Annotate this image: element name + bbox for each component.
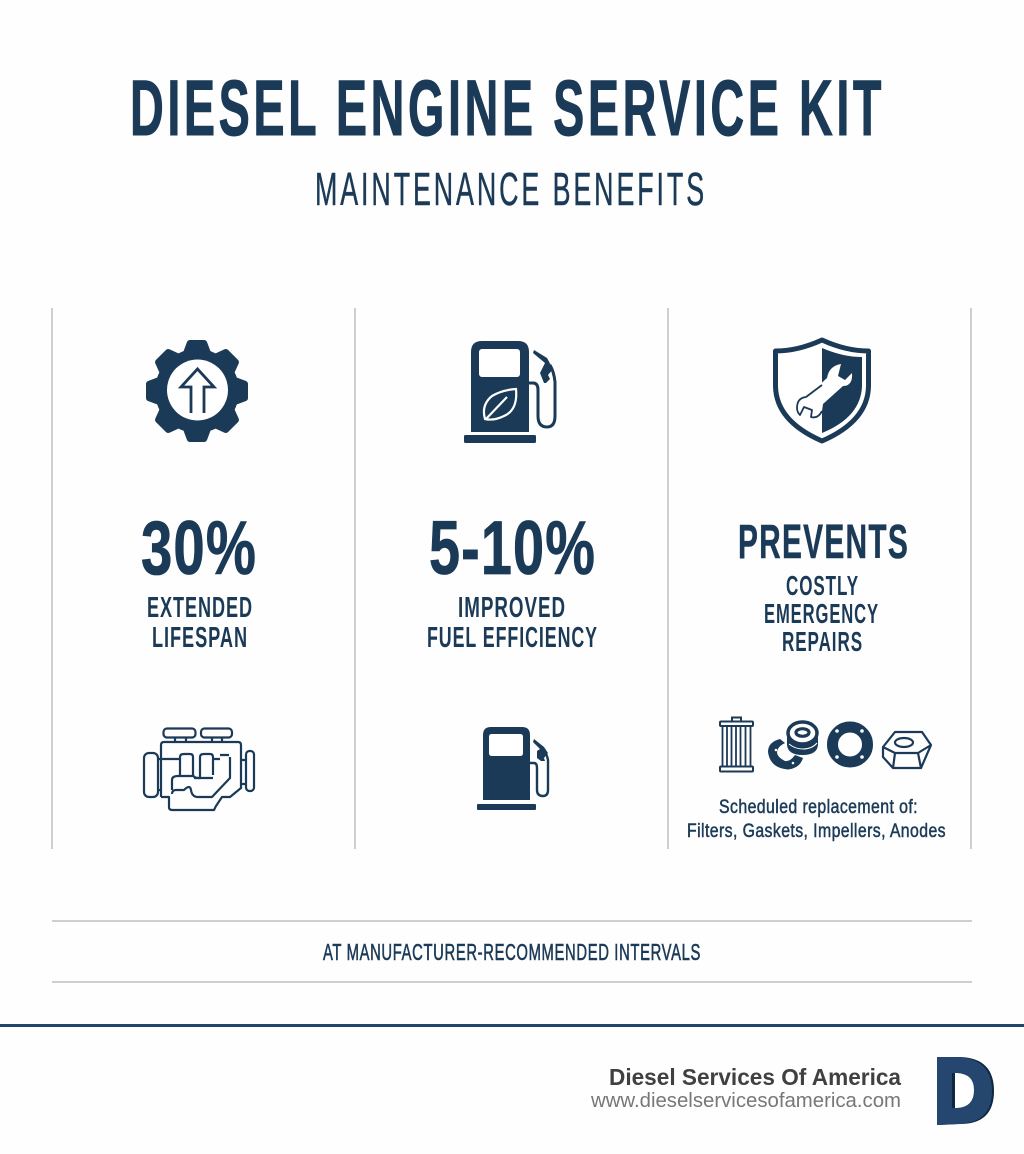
label: improved fuel efficiency: FUEL EFFICIENCY [427,622,598,654]
footer: company: www.dieselservicesofamerica.com [590,1090,901,1112]
icon: fuel pump with leaf [464,341,555,443]
caption: scheduled replacement [687,797,946,842]
icon: small fuel pump [477,727,548,810]
caption: scheduled replacement: Filters, Gaskets, Impellers, Anodes [687,821,946,842]
footer: company: Diesel Services Of America [609,1064,901,1090]
panel: prevents repairs [687,340,946,842]
subtitle: MAINTENANCE BENEFITS [315,163,707,215]
icon: gear with up arrow [146,340,248,442]
label: costly emergency repairs [764,570,879,657]
stat: 5-10%: 5-10% [429,506,596,591]
icon: engine [144,728,254,810]
label: improved fuel efficiency: IMPROVED [458,592,566,624]
label: extended lifespan: EXTENDED [147,592,253,624]
label: costly emergency repairs: REPAIRS [782,626,863,657]
icon: gasket and seal [768,722,818,770]
icon: shield with wrench [776,340,868,441]
logo: D [937,1057,994,1125]
banner: intervals: AT MANUFACTURER-RECOMMENDED INTERVALS [323,939,701,965]
label: costly emergency repairs: COSTLY [786,570,859,601]
label: costly emergency repairs: EMERGENCY [764,598,879,629]
footer rule [0,1024,1024,1027]
panel: extended lifespan [141,340,257,810]
stat: 30%: 30% [141,506,257,591]
icon: hex nut [883,732,931,768]
icon: filter [720,718,753,772]
label: improved fuel efficiency [427,592,598,654]
label: extended lifespan [147,592,253,654]
label: extended lifespan: LIFESPAN [152,622,248,654]
heading: prevents: PREVENTS [738,516,909,569]
icon: round gasket [832,727,868,762]
panel: improved fuel efficiency [427,341,598,810]
caption: scheduled replacement: Scheduled replacement of: [719,797,918,818]
footer: company [590,1064,901,1112]
